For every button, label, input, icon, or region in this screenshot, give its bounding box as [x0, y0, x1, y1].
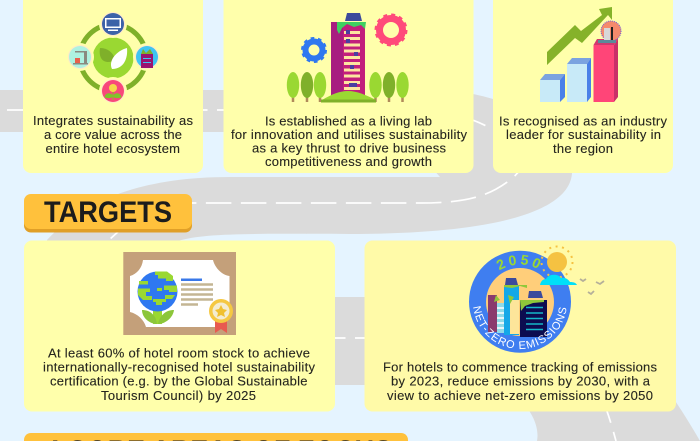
text: certification target: internationally-recognised hotel sustainability	[43, 360, 316, 375]
text: living lab: competitiveness and growth	[265, 154, 432, 169]
text: integrates: a core value across the	[44, 127, 182, 142]
text: certification target: Tourism Council) by 2025	[101, 388, 256, 403]
text: integrates	[33, 113, 194, 156]
panel: net-zero target	[364, 240, 676, 412]
text: net-zero target: For hotels to commence tracking of emissions	[383, 360, 658, 375]
text: living lab: as a key thrust to drive business	[252, 141, 446, 156]
text: integrates: entire hotel ecosystem	[46, 141, 180, 156]
winding road background	[0, 90, 700, 441]
text: living lab	[231, 114, 468, 169]
icon: sustainability certificate	[123, 252, 236, 335]
text: living lab: Is established as a living lab	[265, 114, 432, 128]
text: industry leader: leader for sustainability in	[506, 127, 661, 142]
icon: green building with gears and trees	[287, 13, 409, 102]
text: net-zero target	[383, 360, 658, 403]
icon: net-zero emissions badge: NET-ZERO EMISSIONS	[473, 306, 566, 350]
text: certification target: certification (e.g. by the Global Sustainable	[50, 374, 308, 389]
panel: living lab	[224, 0, 474, 173]
icon: net-zero emissions badge: 2050	[496, 254, 540, 270]
panel: integrates sustainability	[23, 0, 203, 173]
text: industry leader	[499, 114, 668, 156]
icon: sustainability ring	[66, 10, 161, 105]
text: living lab: for innovation and utilises sustainability	[231, 127, 468, 142]
text: net-zero target: by 2023, reduce emissions by 2030, with a	[391, 374, 651, 389]
icon: rising bar chart with arrow	[540, 7, 621, 102]
text: certification target	[43, 346, 316, 403]
panel: certification target	[24, 240, 335, 412]
text: industry leader: the region	[553, 141, 613, 156]
text: integrates: Integrates sustainability as	[33, 113, 194, 128]
text: industry leader: Is recognised as an industry	[499, 114, 668, 128]
heading: targets: TARGETS	[44, 196, 172, 229]
text: certification target: At least 60% of hotel room stock to achieve	[48, 346, 310, 361]
text: net-zero target: view to achieve net-zero emissions by 2050	[387, 388, 653, 403]
panel: industry leader	[493, 0, 673, 173]
icon: net-zero emissions badge	[469, 246, 604, 353]
heading: 4 core areas of focus	[24, 433, 408, 441]
